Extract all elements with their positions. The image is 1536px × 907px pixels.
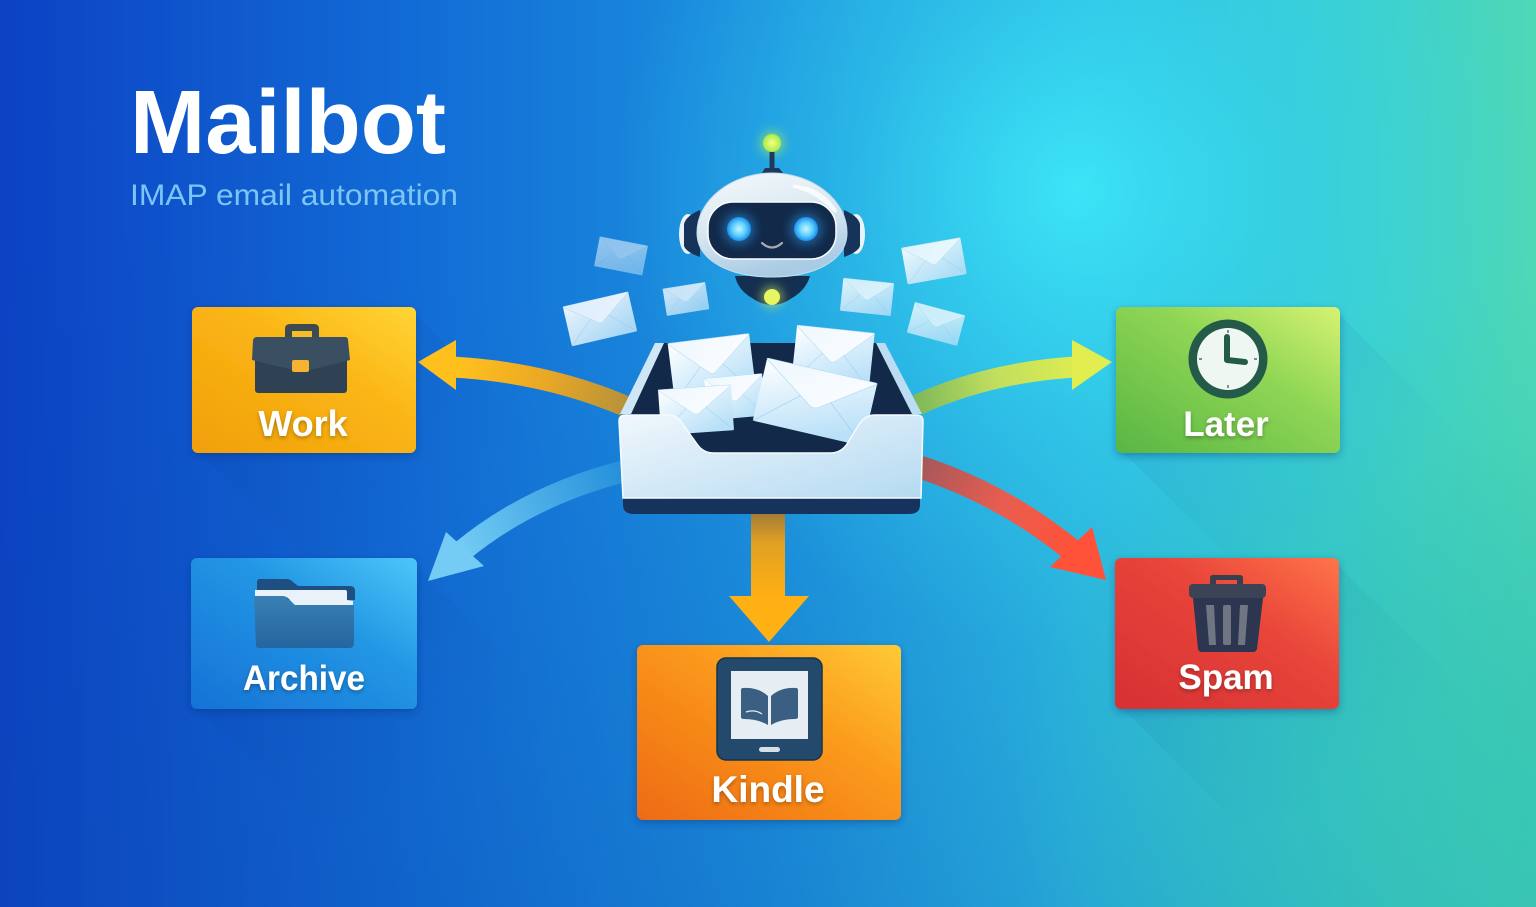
inbox tray with envelopes [619,325,923,514]
robot head [697,173,847,277]
card: Archive [191,558,417,709]
robot body base [735,276,810,305]
card: Spam [1115,558,1339,709]
card: Work [192,307,416,453]
title: Mailbot [130,73,446,173]
antenna [760,131,784,173]
label: Later: Later [1183,405,1269,444]
subtitle: IMAP email automation [130,179,458,212]
icon: trash can [1189,575,1266,652]
icon: folder [254,579,355,648]
arrow: to Later [917,340,1112,405]
card: Later [1116,307,1340,453]
label: Work: Work [258,403,349,444]
tray interior [625,343,916,465]
arrow: to Spam [920,467,1106,580]
arrow: to Work [418,340,625,406]
label: Spam: Spam [1178,658,1274,697]
arrow: to Archive [428,471,625,581]
robot [679,131,865,308]
icon: e-reader [717,658,822,760]
label: Archive: Archive [243,659,365,698]
icon: briefcase [252,324,350,393]
visor with eyes and smile [708,202,836,259]
envelopes in tray [658,325,877,446]
ears [679,210,865,257]
card long shadows [200,315,1480,849]
label: Kindle: Kindle [711,769,825,810]
arrow: to Kindle [729,512,809,642]
card: Kindle [637,645,901,820]
tray front [623,495,920,514]
icon: clock [1188,320,1268,398]
floating envelopes [563,237,967,346]
